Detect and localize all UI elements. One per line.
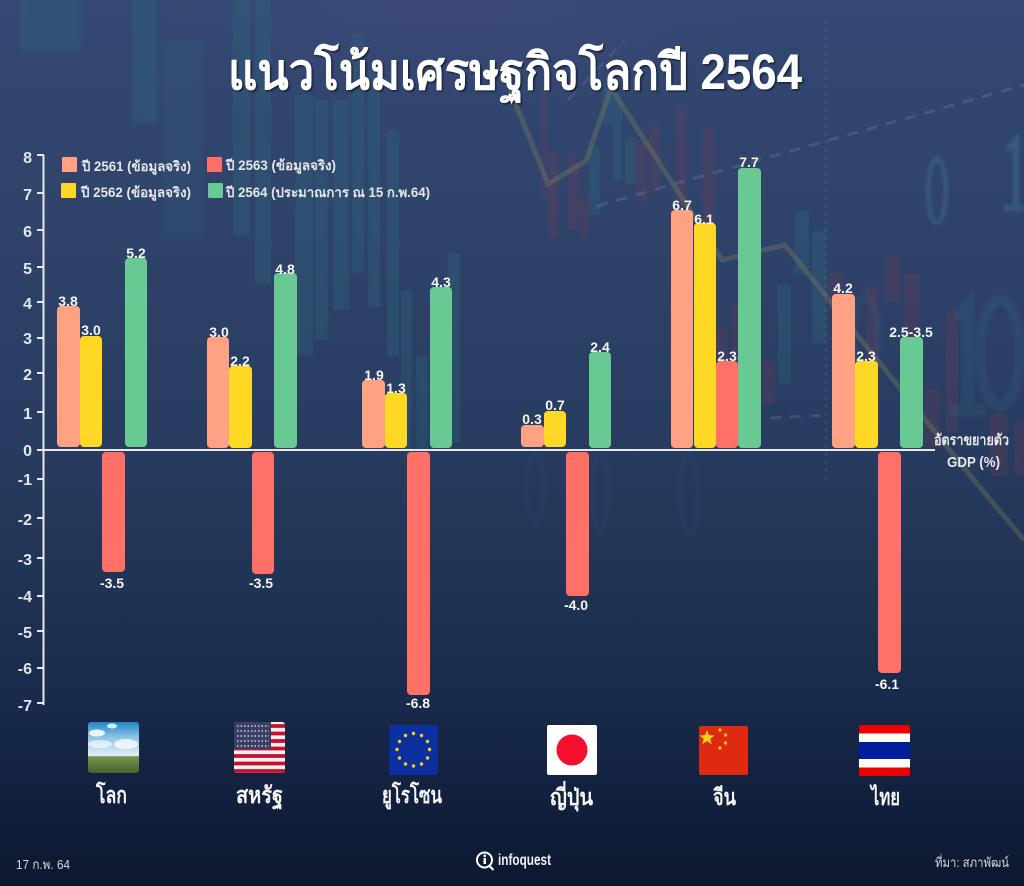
country labels: โลก	[95, 781, 127, 808]
zero baseline	[37, 449, 935, 451]
axis label: GDP (%)	[947, 454, 1000, 471]
legend: ปี 2563 (ข้อมูลจริง)	[225, 158, 336, 174]
group: china: 6.7	[672, 197, 692, 213]
country labels: สหรัฐ	[236, 782, 283, 810]
flag: usa	[234, 722, 285, 773]
logo: infoquest: infoquest	[498, 852, 551, 869]
y axis: 3	[23, 331, 32, 348]
group: thailand	[832, 280, 933, 692]
y axis: 0	[23, 443, 32, 460]
group: world: 3.0	[81, 322, 101, 338]
group: eurozone	[362, 274, 452, 711]
legend: ปี 2564 (ประมาณการ ณ 15 ก.พ.64)	[225, 185, 430, 200]
y axis	[18, 150, 44, 715]
group: world: 5.2	[126, 245, 146, 261]
group: usa: 4.8	[275, 261, 295, 277]
country labels: ไทย	[869, 783, 900, 810]
country labels	[95, 780, 900, 812]
group: eurozone: 1.3	[386, 380, 406, 396]
y axis: 1	[23, 406, 32, 423]
group: eurozone: 1.9	[364, 367, 384, 383]
group: usa: 3.0	[209, 324, 229, 340]
flag: china	[699, 726, 748, 775]
group: japan: 0.7	[545, 397, 565, 413]
country labels: ญี่ปุ่น	[550, 780, 593, 812]
group: world: 3.8	[58, 293, 78, 309]
group: usa: 2.2	[230, 353, 250, 369]
group: japan: 2.4	[590, 339, 610, 355]
y axis: 6	[23, 224, 32, 241]
y axis: -3	[18, 552, 32, 569]
flag: thailand	[859, 725, 910, 776]
group: thailand: 2.3	[856, 348, 876, 364]
group: japan	[521, 339, 611, 613]
country labels: จีน	[713, 784, 736, 810]
title: แนวโน้มเศรษฐกิจโลกปี 2564	[228, 42, 802, 104]
y axis: -6	[18, 661, 32, 678]
flag: eu	[389, 725, 438, 775]
legend: ปี 2561 (ข้อมูลจริง)	[81, 159, 191, 175]
y axis: 7	[23, 187, 32, 204]
legend: ปี 2562 (ข้อมูลจริง)	[80, 185, 191, 201]
axis label	[934, 432, 1009, 471]
y axis: -5	[18, 625, 32, 642]
group: china: 2.3	[717, 348, 737, 364]
group: eurozone: -6.8	[406, 695, 430, 711]
logo: infoquest	[477, 852, 551, 870]
y axis: -7	[18, 698, 32, 715]
group: usa	[207, 261, 297, 591]
y axis: 8	[23, 150, 32, 167]
group: japan: -4.0	[564, 597, 588, 613]
group: world: -3.5	[100, 575, 124, 591]
y axis: 2	[23, 367, 32, 384]
group: eurozone: 4.3	[431, 274, 451, 290]
axis label: อัตราขยายตัว	[934, 432, 1009, 449]
group: thailand: 2.5-3.5	[889, 324, 933, 340]
flag: japan	[547, 725, 597, 775]
group: china	[671, 154, 761, 448]
group: china: 6.1	[694, 211, 714, 227]
y axis: -4	[18, 589, 32, 606]
group: world	[57, 245, 147, 591]
source: ที่มา: สภาพัฒน์	[935, 854, 1009, 870]
y axis: 4	[23, 296, 32, 313]
date: 17 ก.พ. 64	[16, 857, 70, 872]
flag: world	[88, 722, 139, 773]
group: thailand: 4.2	[833, 280, 853, 296]
y axis: 5	[23, 261, 32, 278]
legend	[61, 157, 430, 201]
y axis: -2	[18, 512, 32, 529]
group: china: 7.7	[739, 154, 759, 170]
y axis: -1	[18, 472, 32, 489]
country labels: ยูโรโซน	[382, 781, 442, 810]
group: japan: 0.3	[522, 411, 542, 427]
group: usa: -3.5	[249, 575, 273, 591]
group: thailand: -6.1	[875, 676, 899, 692]
